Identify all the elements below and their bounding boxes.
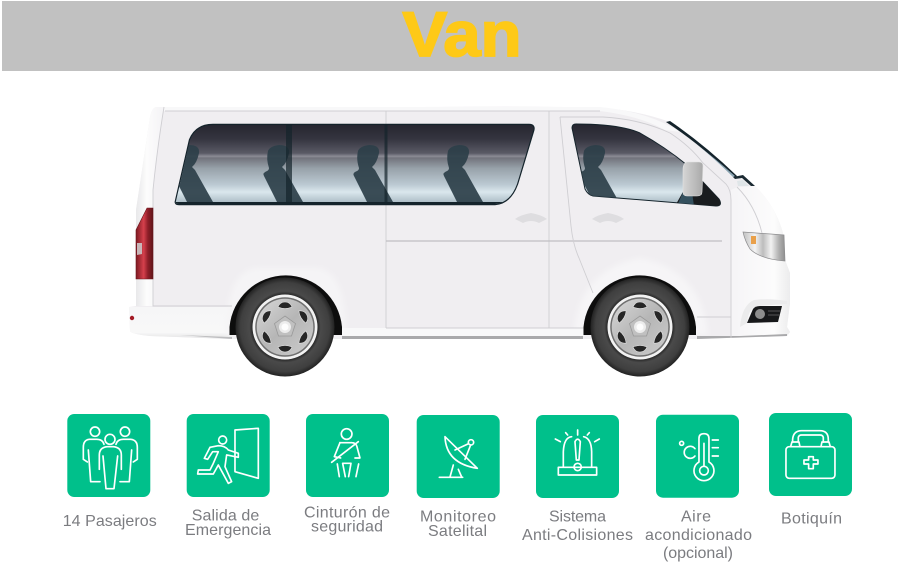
label: Cinturón de bbox=[304, 504, 390, 521]
label bbox=[185, 508, 271, 539]
icon: seat belt bbox=[332, 429, 360, 477]
icon tile: 14 Pasajeros bbox=[63, 414, 157, 530]
rear wheel bbox=[236, 278, 334, 376]
label: Sistema bbox=[549, 509, 606, 526]
icon: satellite dish bbox=[439, 437, 477, 477]
front wheel arch bbox=[584, 275, 696, 335]
driver window bbox=[572, 124, 725, 206]
seats bbox=[176, 125, 502, 204]
label: Emergencia bbox=[185, 522, 271, 539]
tail light bbox=[136, 208, 153, 279]
rear bumper bbox=[129, 307, 232, 339]
windshield bbox=[666, 121, 755, 186]
rear wheel arch bbox=[230, 275, 342, 335]
label: Botiquín bbox=[781, 510, 842, 527]
icon tile: Cinturón de seguridad bbox=[304, 414, 390, 536]
front wheel bbox=[590, 278, 690, 376]
label: acondicionado bbox=[645, 527, 752, 544]
label bbox=[420, 509, 496, 540]
label: Aire bbox=[681, 509, 711, 526]
icon tile: Botiquín bbox=[769, 413, 852, 527]
rear reflector bbox=[130, 316, 134, 320]
icon tile: Sistema Anti-Colisiones bbox=[522, 415, 633, 544]
icon: thermometer bbox=[680, 434, 718, 481]
icon: emergency exit bbox=[198, 428, 258, 483]
label: (opcional) bbox=[663, 545, 733, 562]
label: 14 Pasajeros bbox=[63, 513, 157, 530]
icon tile: Aire acondicionado bbox=[645, 415, 752, 562]
label bbox=[522, 509, 633, 544]
van illustration bbox=[129, 107, 790, 377]
rear panel bbox=[136, 107, 164, 306]
fog lamp bbox=[740, 299, 787, 327]
body panel lines bbox=[153, 107, 762, 338]
label bbox=[304, 504, 390, 536]
title: Van bbox=[402, 0, 522, 70]
side windows bbox=[173, 124, 536, 206]
icon: alarm beacon bbox=[555, 430, 599, 475]
headlight bbox=[743, 232, 785, 261]
label: Monitoreo bbox=[420, 509, 496, 526]
side mirror bbox=[683, 162, 703, 196]
door handles bbox=[515, 213, 624, 223]
front nose bbox=[731, 186, 790, 338]
sill strip bbox=[180, 328, 787, 339]
label bbox=[645, 509, 752, 562]
title banner bbox=[2, 0, 898, 71]
icon: passengers bbox=[83, 427, 137, 489]
icon tile: Salida de Emergencia bbox=[185, 414, 271, 539]
wheel arch flares bbox=[226, 258, 708, 335]
roof highlight bbox=[164, 107, 680, 132]
label: seguridad bbox=[311, 519, 383, 536]
van body bbox=[129, 107, 790, 339]
icon: first aid kit bbox=[786, 431, 835, 478]
label: Anti-Colisiones bbox=[522, 527, 633, 544]
icon tile: Monitoreo Satelital bbox=[417, 415, 500, 540]
label: Salida de bbox=[192, 508, 259, 525]
label: Satelital bbox=[428, 523, 487, 540]
